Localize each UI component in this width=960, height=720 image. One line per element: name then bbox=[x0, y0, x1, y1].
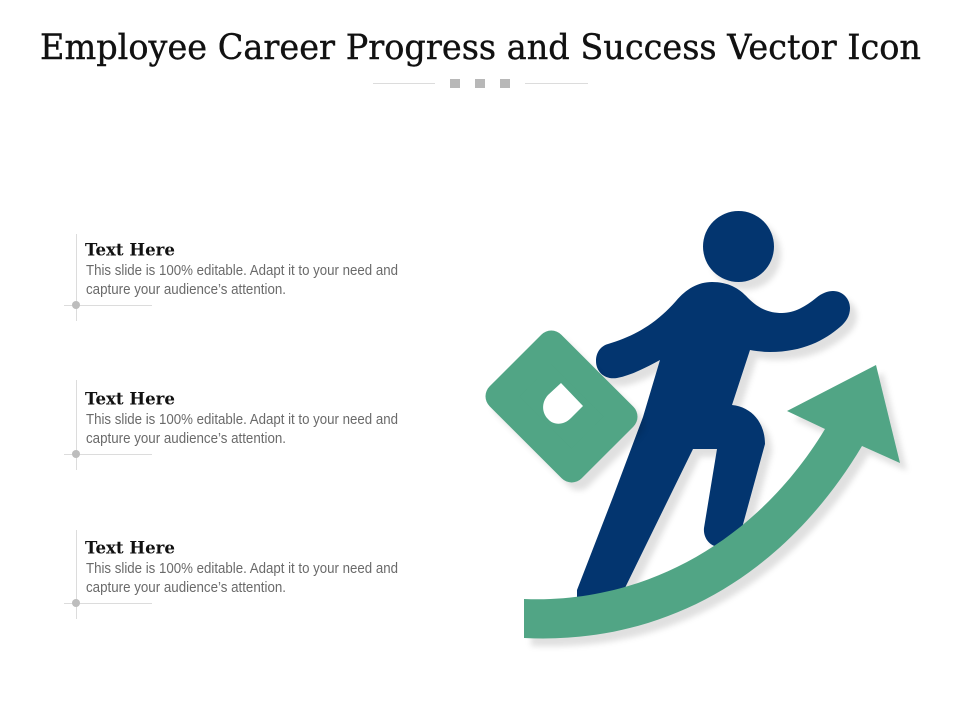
text block 3: This slide is 100% editable. Adapt it to your need and bbox=[86, 561, 398, 577]
text block 1: Text Here bbox=[85, 240, 175, 260]
text block 2 bbox=[64, 380, 398, 470]
icon: briefcase bbox=[500, 344, 624, 468]
text block 1: capture your audience’s attention. bbox=[86, 282, 286, 298]
title: Employee Career Progress and Success Vector Icon bbox=[40, 28, 921, 68]
icon: briefcase handle bbox=[543, 383, 583, 424]
text block 3: capture your audience’s attention. bbox=[86, 580, 286, 596]
text block 1: This slide is 100% editable. Adapt it to your need and bbox=[86, 263, 398, 279]
icon: person head bbox=[703, 211, 774, 282]
icon: rising arrow bbox=[524, 365, 900, 638]
icon: employee with briefcase on rising arrow bbox=[500, 211, 900, 638]
text block 2: Text Here bbox=[85, 390, 175, 410]
icon: person body bbox=[577, 282, 850, 600]
title divider bbox=[373, 79, 588, 88]
text block 2: capture your audience’s attention. bbox=[86, 431, 286, 447]
text block 1 bbox=[64, 234, 398, 321]
text block 3: Text Here bbox=[85, 538, 175, 558]
text block 2: This slide is 100% editable. Adapt it to your need and bbox=[86, 412, 398, 428]
text block 3 bbox=[64, 530, 398, 619]
